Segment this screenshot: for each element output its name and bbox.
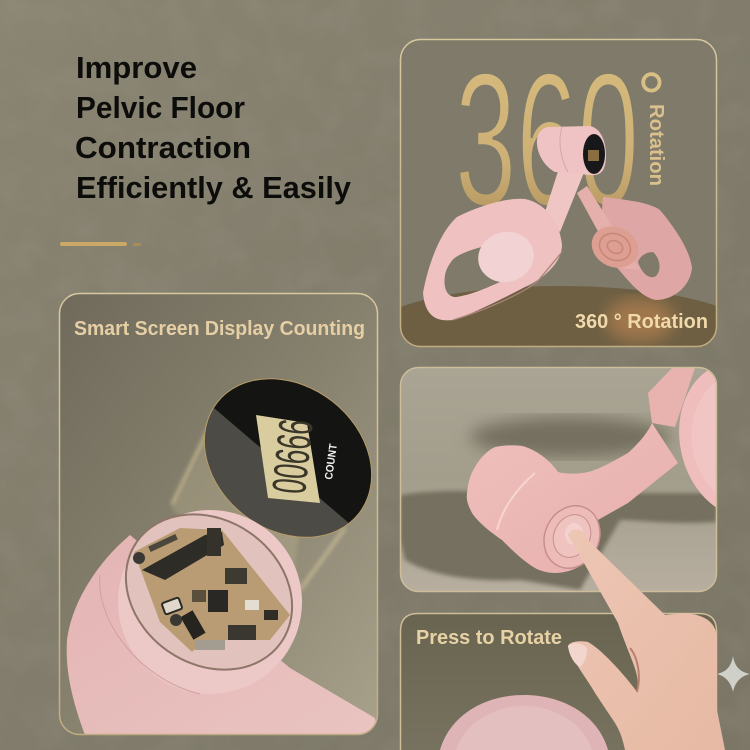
pink body	[67, 535, 378, 735]
title: Pelvic Floor	[76, 90, 245, 125]
shadow band	[400, 491, 717, 590]
circuit board	[133, 528, 290, 652]
display disc	[204, 378, 372, 538]
product: head with screen	[537, 126, 606, 175]
light beam	[172, 420, 345, 600]
product: rotating handle	[466, 368, 717, 573]
title: Contraction	[75, 130, 251, 165]
vertical rotation label: Rotation	[645, 104, 667, 186]
display disc: 00666	[263, 417, 324, 496]
title	[75, 50, 352, 205]
caption: 360 ° Rotation	[575, 311, 708, 333]
icon: sparkle	[717, 656, 750, 692]
circuit window	[124, 513, 294, 671]
large 360 numerals: 360	[455, 33, 639, 245]
heading: smart screen: Smart Screen Display Counting	[74, 318, 365, 340]
floor disc	[401, 286, 716, 346]
product: left loop and arm	[423, 165, 585, 320]
title: Efficiently & Easily	[76, 170, 352, 205]
product: right loop	[577, 186, 692, 300]
panel: 360 rotation	[401, 40, 716, 346]
panel: smart screen display	[59, 293, 403, 735]
title: Improve	[76, 50, 197, 85]
degree mark: °	[637, 59, 666, 139]
panel: press to rotate	[400, 613, 717, 750]
display disc: COUNT	[323, 443, 340, 480]
hand pressing button	[568, 529, 725, 750]
floor glow	[605, 298, 675, 342]
pink dome	[440, 695, 608, 750]
panel: press button	[401, 368, 717, 591]
pink cap	[118, 510, 302, 694]
heading: press to rotate: Press to Rotate	[416, 627, 562, 649]
gold divider	[60, 242, 141, 246]
